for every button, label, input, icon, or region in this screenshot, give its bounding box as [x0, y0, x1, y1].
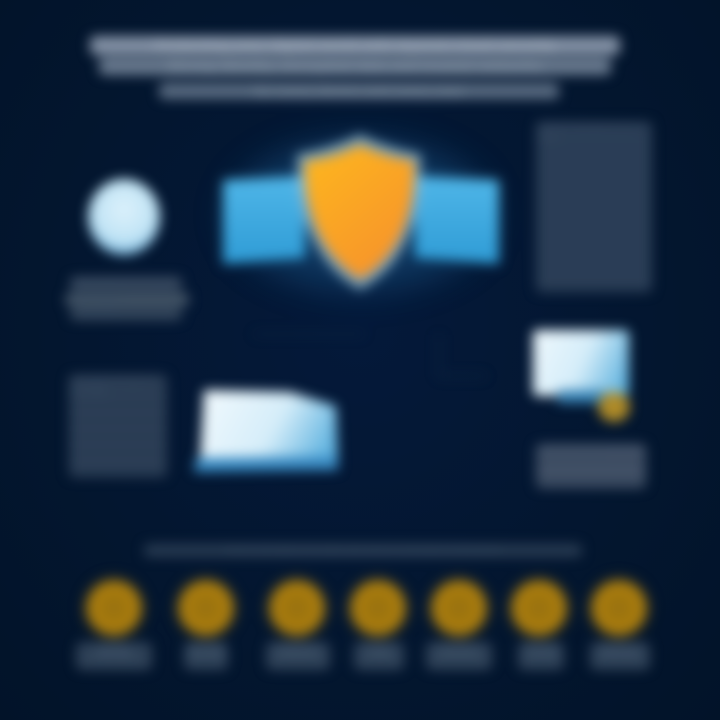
- left globe caption: Everywhere: [70, 308, 118, 318]
- connector lines: [250, 325, 490, 385]
- row of badges: [70, 570, 657, 676]
- badge 7: [592, 581, 646, 635]
- left globe caption: Global access: [70, 277, 127, 287]
- badge label 5: Devices: [439, 646, 479, 658]
- badge 6: [512, 581, 566, 635]
- badge label 3: Network: [278, 646, 318, 658]
- title: Strong identity, encrypted data and trusted networks: [167, 58, 543, 75]
- badge 3: [270, 581, 324, 635]
- badge label 1: Identity: [96, 646, 132, 658]
- badge label 6: [518, 642, 564, 670]
- badge label 5: [426, 642, 492, 670]
- badge label 2: [184, 642, 228, 670]
- badge label 6: Cloud: [527, 646, 555, 658]
- center cloud panel: [186, 380, 347, 481]
- left lower text block: Encrypted storage for your data: [69, 375, 155, 395]
- badge label 2: Access: [188, 646, 224, 658]
- badge label 4: Data: [367, 646, 391, 658]
- central shield with blue banner: [212, 124, 510, 302]
- right laptop icon: [523, 320, 638, 431]
- badge 1: [87, 581, 141, 635]
- left globe icon: [78, 170, 170, 264]
- badge 5: [432, 581, 486, 635]
- left globe caption: Trusted sign-in: [65, 293, 124, 303]
- badge label 4: [354, 642, 404, 670]
- badge label 3: [266, 642, 330, 670]
- badge 2: [179, 581, 233, 635]
- title: Protecting your digital world with layered cloud security: [155, 37, 555, 54]
- badge 4: [351, 581, 405, 635]
- badge label 7: Backup: [602, 646, 638, 658]
- title: for every device and every user: [254, 83, 464, 99]
- left globe caption: [60, 271, 194, 326]
- title: [82, 28, 628, 107]
- top right text block: Identity verification for all users: [536, 122, 635, 142]
- badge label 1: [76, 642, 152, 670]
- badge label 7: [590, 642, 650, 670]
- section subheading: Seven principles of a safe and secure connected environment: [226, 545, 500, 556]
- right lower caption: Device protection: [536, 444, 606, 454]
